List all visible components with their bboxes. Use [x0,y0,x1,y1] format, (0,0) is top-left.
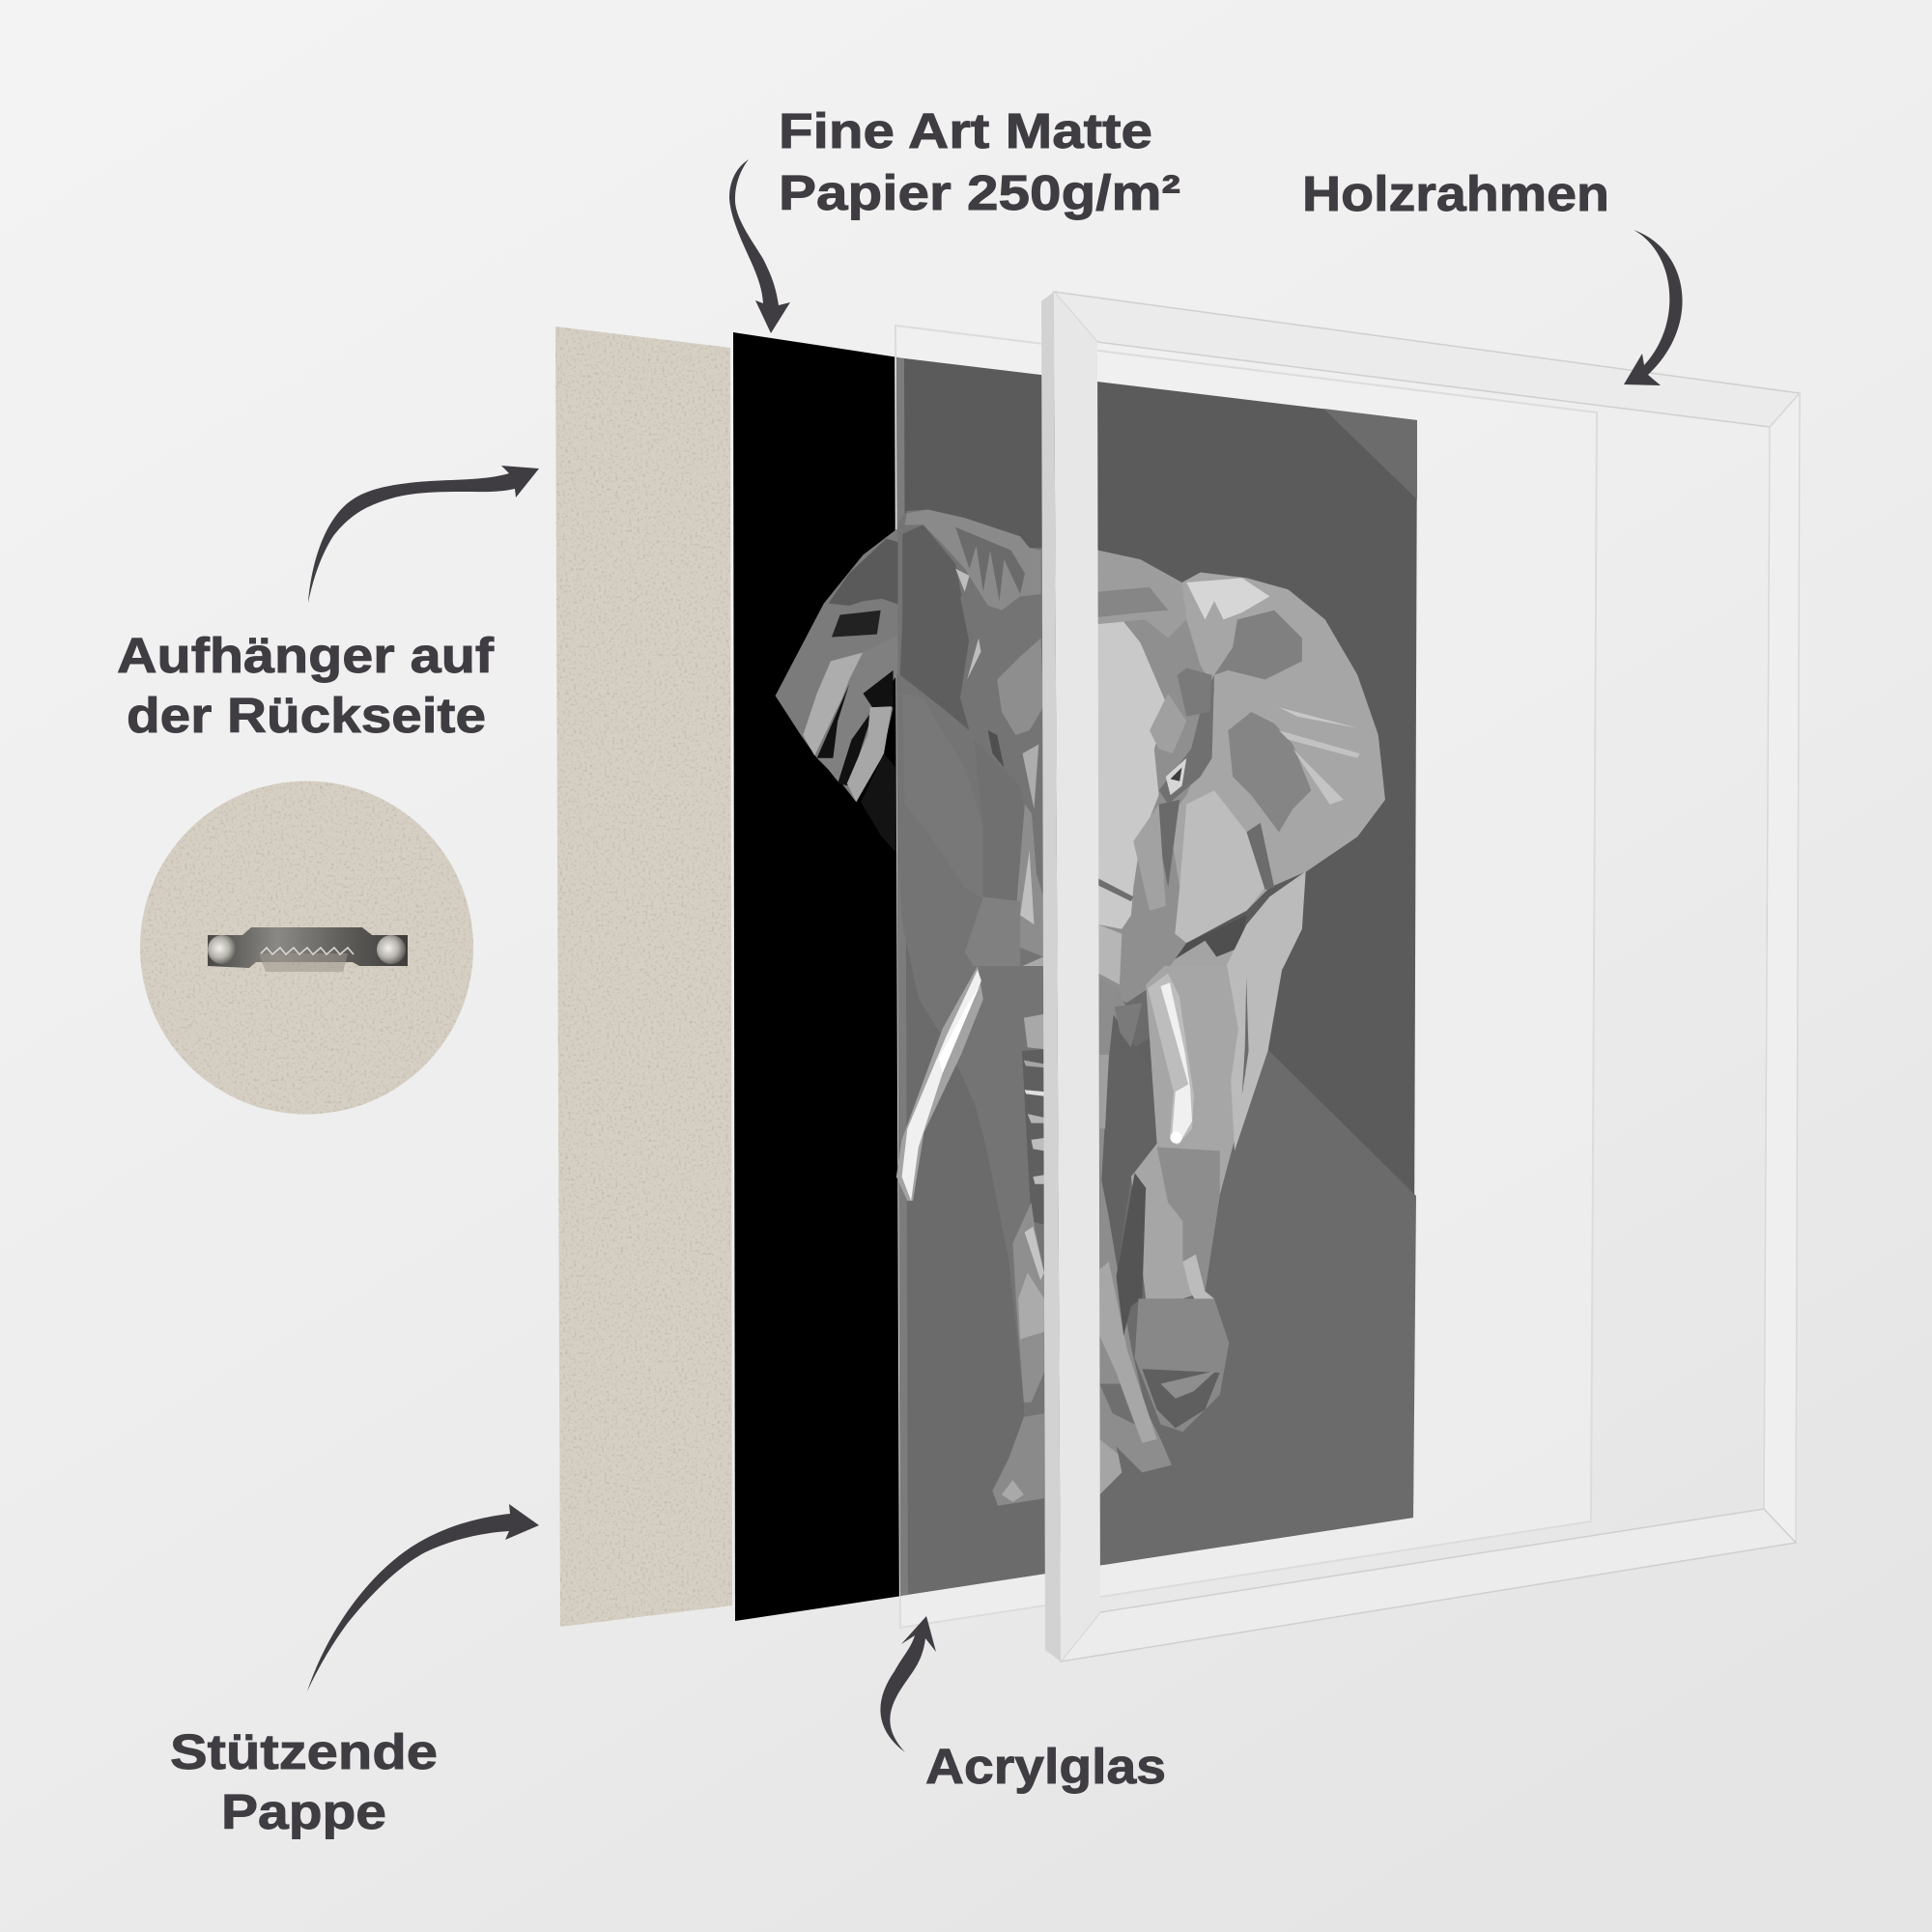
right front leg [1117,966,1283,1432]
heading: Fine Art Matte Papier [779,103,1180,220]
right leg top [1168,941,1284,969]
heading: Stützende Pappe: Pappe [221,1784,386,1839]
trunk [1099,977,1172,1494]
right tusk [1148,974,1194,1146]
dark gap right of trunk [1106,1036,1156,1159]
forehead and ear [1097,551,1385,1003]
frame bottom band [1061,1509,1796,1662]
arrow: to acrylic glass [880,1616,936,1752]
elephant upper body [776,509,1385,1159]
heading: Aufhänger auf der Rückseite [117,628,495,743]
panel: wooden frame [1041,292,1800,1662]
left ear on black [776,525,902,853]
icon: hanger detail circle [140,781,473,1115]
heading: Holzrahmen: Holzrahmen [1302,166,1609,221]
frame side edge [1041,292,1061,1662]
heading: Fine Art Matte Papier: Papier 250g/m² [779,165,1180,220]
arrow: to cardboard bottom [307,1504,539,1691]
right leg outer strip [1225,871,1306,969]
heading: Fine Art Matte Papier: Fine Art Matte [779,103,1152,158]
shadow under ear [1175,915,1246,959]
left leg [911,966,1044,1506]
frame left band [1054,292,1100,1662]
heading: Aufhänger auf der Rückseite: Aufhänger auf [117,628,495,683]
elephant lower body [896,966,1283,1506]
panel: printed poster seen through acrylic [896,357,1417,1596]
dark gap beside trunk [1101,1003,1157,1276]
head and body through glass [897,509,1043,1159]
frame top band [1054,292,1800,427]
heading: Aufhänger auf der Rückseite: der Rückseite [127,688,486,743]
mouth tuft [1118,1006,1145,1047]
chart: elephant artwork [776,509,1385,1506]
panel: acrylic glass sheet [895,326,1597,1628]
panel: black fine art paper [733,332,902,1621]
arrow: to cardboard top [308,466,539,603]
light reflection lower [896,673,1416,1596]
frame right band [1764,393,1800,1543]
heading: Acrylglas: Acrylglas [925,1739,1166,1794]
icon: sawtooth hanger [208,927,408,972]
panel: cardboard backing [555,327,732,1627]
arrow: to frame [1624,230,1683,385]
left tusk [896,966,983,1201]
arrow: to black paper [729,159,790,333]
heading: Stützende Pappe: Stützende [170,1724,438,1779]
light reflection upper corner [1323,409,1417,499]
trunk upper [1097,924,1122,984]
heading: Stützende Pappe [170,1724,438,1839]
acrylic edge strip [896,357,908,1596]
